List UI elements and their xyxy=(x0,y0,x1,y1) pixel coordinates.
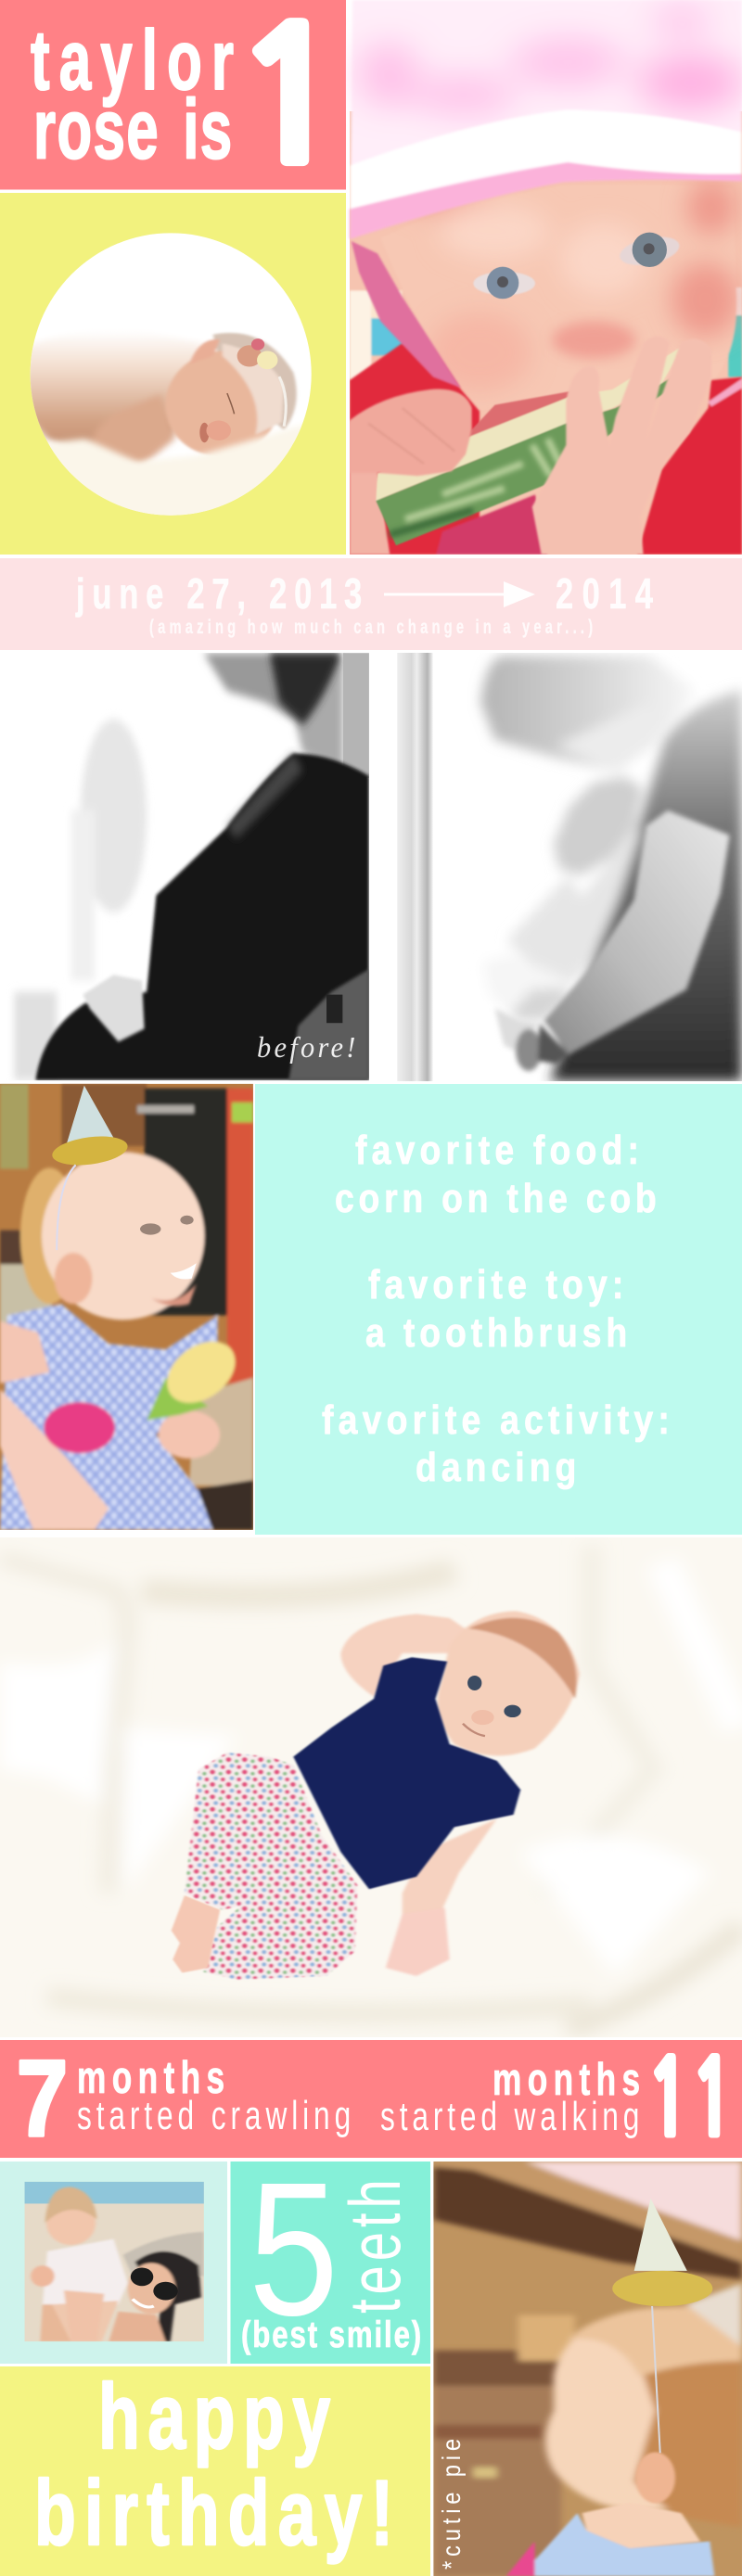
watermelon xyxy=(376,346,710,545)
arm xyxy=(544,810,730,1054)
hands xyxy=(350,336,711,555)
shirt xyxy=(550,690,742,1081)
hair xyxy=(18,1167,65,1306)
title line: taylor: taylor xyxy=(31,14,234,108)
panel: title block xyxy=(0,0,350,189)
favorite activity: dancing xyxy=(416,1444,576,1490)
arrow xyxy=(384,581,535,607)
baby xyxy=(507,817,640,987)
numeral 5: 5 xyxy=(249,2143,339,2355)
favorite toy xyxy=(365,1261,627,1356)
big numeral 1: 1 xyxy=(231,6,350,189)
black sweater xyxy=(35,753,369,1080)
photo: baby on white fur xyxy=(0,1537,742,2037)
date: june 27, 2013: june 27, 2013 xyxy=(75,569,362,618)
corn xyxy=(147,1378,208,1421)
sun hat xyxy=(350,0,742,239)
handwritten label: before!: before! xyxy=(257,1030,355,1064)
panel: happy birthday xyxy=(0,2366,430,2576)
date: 2014: 2014 xyxy=(556,569,653,618)
hand on belly xyxy=(83,975,145,1041)
label: 7 months: months xyxy=(77,2052,224,2103)
label: best smile: (best smile) xyxy=(241,2314,421,2355)
photo: baby eating watermelon xyxy=(350,111,742,555)
heading: happy: happy xyxy=(98,2366,330,2468)
left arm xyxy=(350,420,390,555)
panel: date strip xyxy=(0,558,742,650)
caption: (amazing how much can change in a year...) xyxy=(149,616,593,638)
favorite food: favorite food: xyxy=(355,1127,639,1173)
party hat xyxy=(634,2199,687,2271)
panel: newborn circle on yellow xyxy=(0,193,346,555)
panel: milestones xyxy=(0,2038,742,2159)
photo: party hat baby with corn xyxy=(0,1084,253,1530)
label: teeth: teeth xyxy=(335,2179,416,2314)
face xyxy=(42,1152,204,1320)
favorite food xyxy=(335,1127,657,1221)
window frame xyxy=(397,653,433,1081)
photo: mother kissing baby xyxy=(371,653,742,1081)
label: started crawling: started crawling xyxy=(77,2093,351,2138)
label: started walking: started walking xyxy=(380,2094,639,2139)
eyes xyxy=(473,232,682,299)
party hat xyxy=(66,1086,114,1145)
photo: party hat baby in profile xyxy=(433,2162,742,2576)
numeral 7: 7 xyxy=(17,2038,68,2159)
dress xyxy=(0,1304,218,1530)
panel: teeth count xyxy=(230,2143,430,2364)
photo: sleeping newborn xyxy=(24,233,313,521)
hat strap xyxy=(352,241,461,388)
panel: favorites xyxy=(255,1084,742,1535)
heading: birthday!: birthday! xyxy=(34,2462,393,2565)
title line: rose is: rose is xyxy=(33,83,232,176)
favorite toy: favorite toy: xyxy=(368,1261,623,1307)
favorite food: corn on the cob xyxy=(335,1175,657,1221)
skin arms xyxy=(0,1321,50,1384)
flower xyxy=(44,1402,115,1453)
panel: beach photo xyxy=(0,2162,227,2364)
favorite toy: a toothbrush xyxy=(365,1309,627,1356)
label: 11 months: months xyxy=(493,2054,640,2105)
photo: pregnant mother before xyxy=(0,653,369,1080)
favorite activity: favorite activity: xyxy=(322,1396,670,1443)
baby xyxy=(172,1611,580,1980)
favorite activity xyxy=(322,1396,670,1490)
child head xyxy=(545,2283,742,2527)
head xyxy=(480,656,696,772)
photo: baby and mother at beach xyxy=(25,2182,204,2341)
label: cutie pie: *cutie pie xyxy=(436,2439,466,2570)
